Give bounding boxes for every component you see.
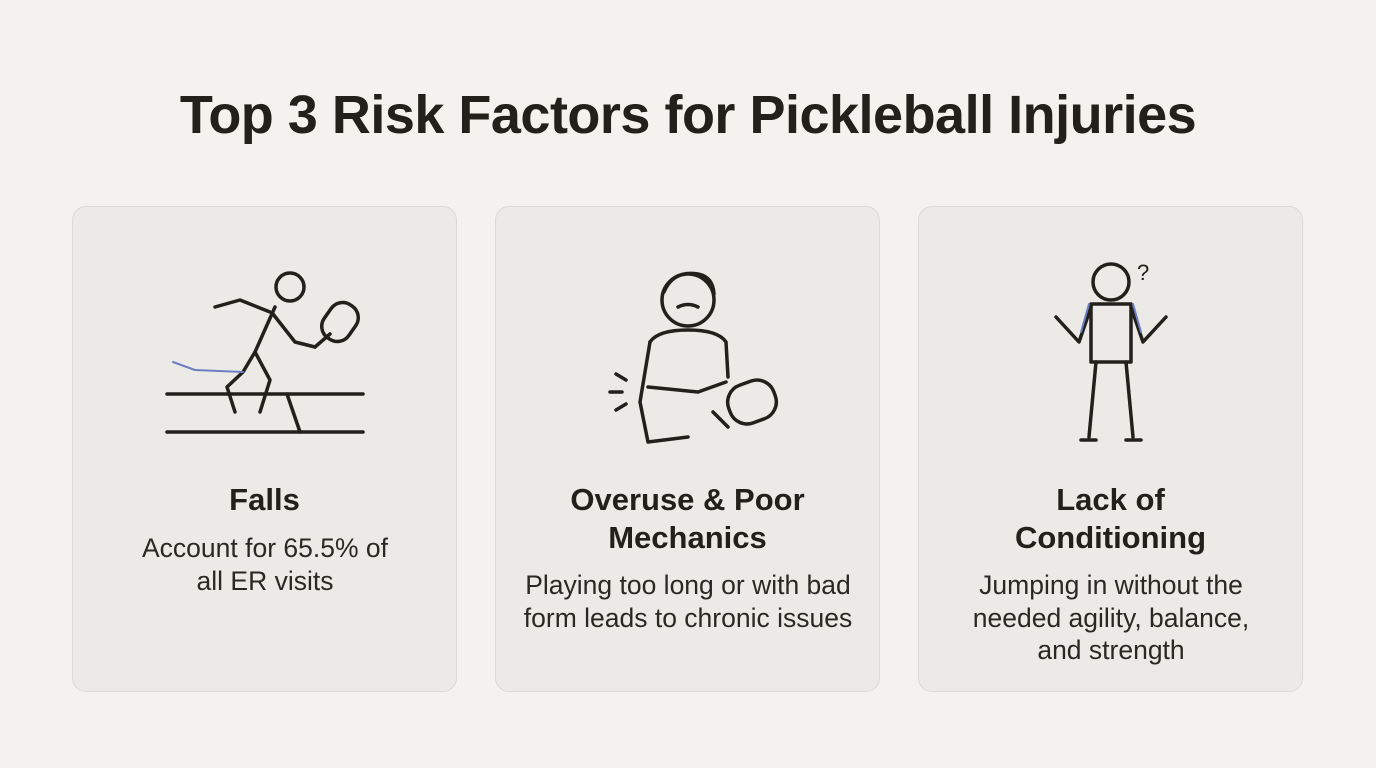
heading: Lack of — [1056, 482, 1165, 517]
heading — [1015, 482, 1206, 555]
description: all ER visits — [197, 566, 333, 596]
title: Top 3 Risk Factors for Pickleball Injuries — [180, 85, 1196, 145]
description — [973, 570, 1249, 665]
heading: Overuse & Poor — [570, 482, 805, 517]
icon: falling player — [165, 271, 365, 434]
description: needed agility, balance, — [973, 602, 1249, 632]
description — [524, 570, 852, 632]
description: form leads to chronic issues — [524, 602, 852, 632]
description: Jumping in without the — [979, 570, 1243, 600]
heading: Mechanics — [608, 520, 767, 555]
heading: Falls — [229, 482, 300, 517]
description: and strength — [1037, 635, 1185, 665]
heading — [570, 482, 805, 555]
panel: conditioning — [918, 206, 1303, 692]
icon: sore elbow — [608, 272, 778, 444]
panel: overuse — [495, 206, 880, 692]
description: Playing too long or with bad — [525, 570, 851, 600]
heading: Conditioning — [1015, 520, 1206, 555]
description: Account for 65.5% of — [142, 533, 388, 563]
icon: confused person — [1054, 262, 1168, 442]
panel: falls — [72, 206, 457, 692]
description — [142, 533, 388, 596]
